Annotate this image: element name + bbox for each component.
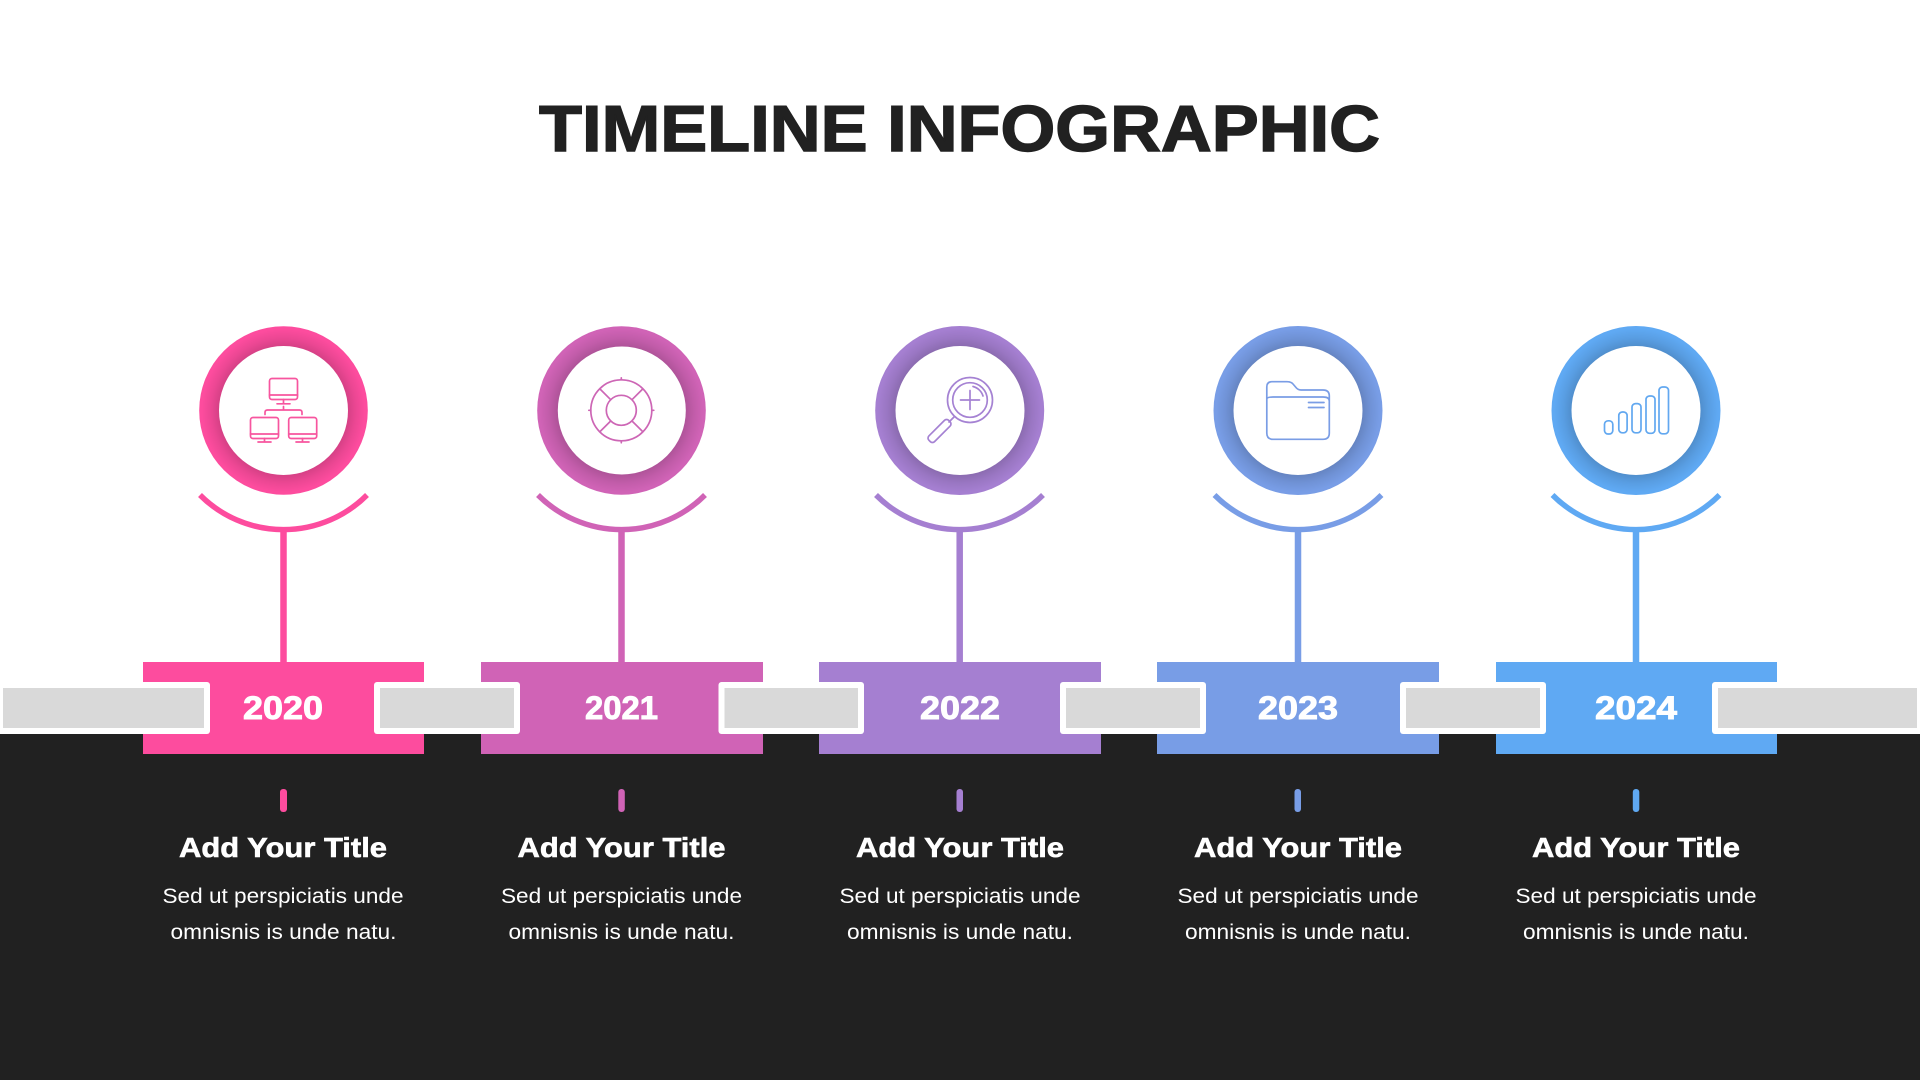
title: TIMELINE INFOGRAPHIC — [539, 92, 1380, 165]
year box 2020 — [143, 662, 424, 754]
description: Sed ut perspiciatis unde — [1516, 885, 1756, 908]
segment 5 — [1400, 682, 1546, 734]
year label: 2023 — [1258, 690, 1338, 726]
milestone 2023 — [1157, 326, 1439, 944]
dark footer band — [0, 734, 1920, 1080]
ring: 2022 — [875, 326, 1044, 495]
icon: magnifier — [927, 378, 992, 444]
description: Sed ut perspiciatis unde — [162, 885, 404, 908]
heading: Add Your Title — [1194, 832, 1402, 863]
heading: Add Your Title — [518, 832, 726, 863]
connector arc — [876, 495, 1043, 530]
description: Sed ut perspiciatis unde — [501, 885, 742, 908]
segment 2 — [374, 682, 520, 734]
heading: Add Your Title — [856, 832, 1064, 863]
segment 6 — [1712, 682, 1920, 734]
icon: networked computers — [250, 378, 317, 442]
tick — [1633, 789, 1639, 812]
year box 2021 — [481, 662, 763, 754]
description: omnisnis is unde natu. — [1523, 921, 1749, 944]
year box 2024 — [1496, 662, 1777, 754]
connector stem — [956, 529, 963, 662]
connector stem — [280, 529, 287, 662]
description: omnisnis is unde natu. — [847, 921, 1073, 944]
milestone 2022 — [819, 326, 1101, 944]
segment 1 — [0, 682, 210, 734]
segment 4 — [1060, 682, 1206, 734]
year label: 2020 — [243, 690, 323, 726]
connector stem — [1633, 529, 1639, 662]
year box 2022 — [819, 662, 1101, 754]
connector arc — [538, 495, 705, 530]
timeline bar segments — [0, 682, 1920, 734]
year label: 2022 — [920, 690, 1000, 726]
milestone 2024 — [1496, 326, 1777, 944]
connector arc — [200, 495, 367, 530]
icon: folder — [1267, 382, 1329, 439]
description: Sed ut perspiciatis unde — [1178, 885, 1418, 908]
heading: Add Your Title — [1532, 832, 1740, 863]
connector arc — [1552, 495, 1720, 530]
heading: Add Your Title — [179, 832, 387, 863]
year label: 2024 — [1595, 690, 1677, 726]
connector stem — [618, 529, 625, 662]
ring: 2023 — [1214, 326, 1382, 495]
description: omnisnis is unde natu. — [508, 921, 734, 944]
icon: lifebuoy — [589, 378, 654, 443]
ring: 2021 — [537, 326, 706, 495]
tick — [618, 789, 625, 812]
connector stem — [1295, 529, 1301, 662]
icon: signal bars — [1604, 387, 1668, 434]
milestone 2020 — [143, 326, 424, 944]
segment 3 — [718, 682, 864, 734]
year box 2023 — [1157, 662, 1439, 754]
tick — [280, 789, 287, 812]
description: omnisnis is unde natu. — [170, 921, 396, 944]
tick — [956, 789, 963, 812]
milestone 2021 — [481, 326, 763, 944]
connector arc — [1214, 495, 1382, 530]
description: omnisnis is unde natu. — [1185, 921, 1411, 944]
ring: 2020 — [199, 326, 368, 495]
description: Sed ut perspiciatis unde — [840, 885, 1080, 908]
ring: 2024 — [1552, 326, 1720, 495]
tick — [1294, 789, 1301, 812]
year label: 2021 — [585, 690, 658, 726]
